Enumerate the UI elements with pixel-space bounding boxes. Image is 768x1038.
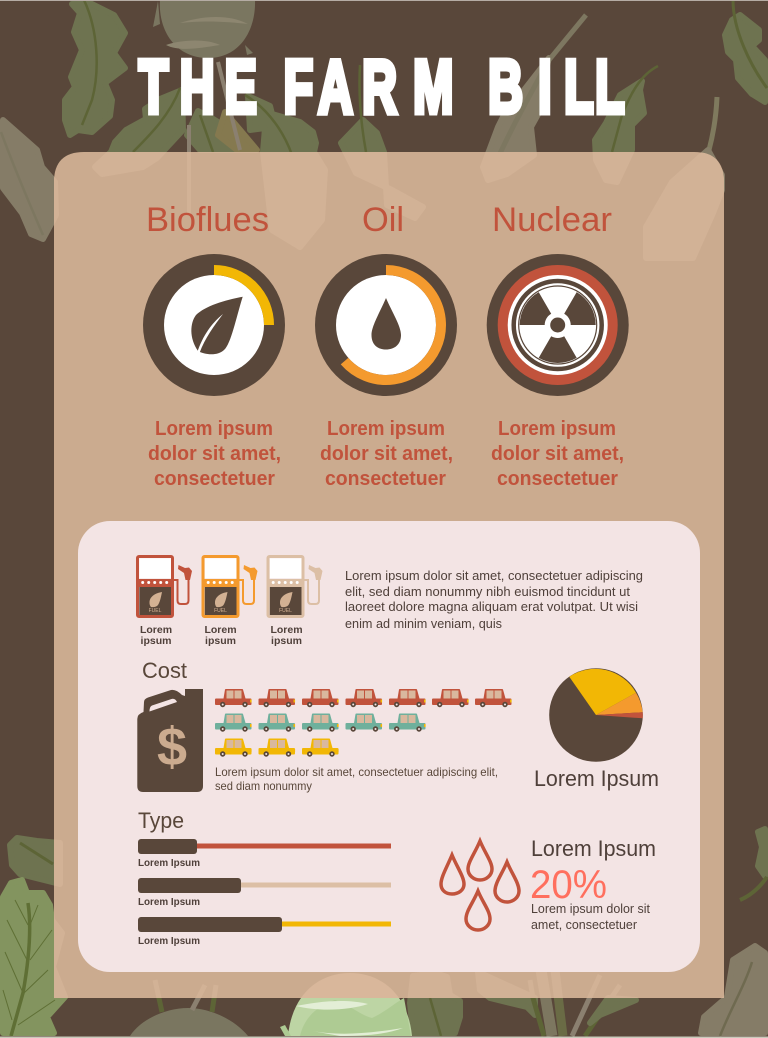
stat number: 20%	[530, 863, 607, 907]
top edge	[0, 0, 768, 1]
icon: tan fuel pump: FUEL	[279, 608, 292, 614]
panel: inner light card	[78, 521, 700, 972]
text block: nuclear caption: Lorem ipsum	[498, 418, 616, 440]
label: pump three	[270, 624, 303, 647]
heading: Cost: Cost	[142, 658, 187, 683]
text block: oil caption: consectetuer	[325, 468, 446, 490]
label: pump two: Lorem	[204, 624, 237, 636]
text block: biofuel caption	[148, 418, 281, 490]
label: pump two	[204, 624, 237, 647]
bar two: Lorem Ipsum	[138, 896, 200, 908]
bottom edge	[0, 1036, 768, 1038]
icon: orange fuel pump	[202, 556, 258, 616]
pie chart	[549, 668, 643, 762]
label: pump two: ipsum	[205, 635, 236, 647]
text block: biofuel caption: consectetuer	[154, 468, 275, 490]
text block: cost caption	[215, 765, 498, 793]
text block: stat caption	[531, 902, 651, 932]
title: THE FARM BILL	[139, 46, 625, 129]
label: pump three: ipsum	[271, 635, 302, 647]
stat heading: Lorem Ipsum	[531, 836, 656, 861]
icon: water drops	[441, 841, 519, 930]
icon row: yellow cars	[215, 738, 339, 757]
label: pump one	[140, 624, 172, 647]
label: pump one: Lorem	[140, 624, 172, 636]
text block: intro paragraph: Lorem ipsum dolor sit amet, consectetuer adipiscing	[345, 569, 643, 583]
bar one: Lorem Ipsum	[138, 857, 200, 869]
icon row: teal cars	[215, 714, 426, 732]
text block: cost caption: Lorem ipsum dolor sit amet, consectetuer adipiscing elit,	[215, 765, 498, 779]
label: pump one: ipsum	[141, 635, 171, 647]
heading: Bioflues: Bioflues	[146, 201, 269, 239]
bar three	[138, 917, 391, 947]
text block: oil caption	[320, 418, 453, 490]
icon: red fuel pump	[136, 556, 192, 616]
bar three: Lorem Ipsum	[138, 935, 200, 947]
text block: nuclear caption: dolor sit amet,	[491, 443, 624, 465]
text block: intro paragraph: laoreet dolore magna aliquam erat volutpat. Ut wisi	[345, 600, 638, 614]
text block: nuclear caption	[491, 418, 624, 490]
text block: biofuel caption: Lorem ipsum	[155, 418, 273, 440]
icon: oil gauge	[315, 254, 457, 396]
cabbage at the top	[153, 1, 253, 55]
text block: stat caption: Lorem ipsum dolor sit	[531, 902, 651, 916]
icon: fuel can with dollar sign: $	[157, 717, 187, 777]
text block: intro paragraph	[345, 569, 643, 631]
icon: orange fuel pump: FUEL	[214, 608, 227, 614]
pie chart label: Lorem Ipsum	[534, 766, 659, 791]
heading: Oil: Oil	[362, 201, 404, 239]
text block: cost caption: sed diam nonummy	[215, 779, 312, 793]
icon row: red cars	[215, 689, 512, 707]
icon: tan fuel pump	[266, 556, 322, 616]
cabbage at the bottom	[280, 998, 411, 1036]
text block: oil caption: Lorem ipsum	[327, 418, 445, 440]
heading: Type: Type	[138, 808, 184, 833]
text block: nuclear caption: consectetuer	[497, 468, 618, 490]
icon: nuclear gauge	[487, 254, 629, 396]
text block: intro paragraph: elit, sed diam nonummy nibh euismod tincidunt ut	[345, 585, 631, 599]
panel: main tan card	[54, 152, 724, 998]
text block: intro paragraph: enim ad minim veniam, quis	[345, 617, 502, 631]
icon: fuel can with dollar sign	[137, 689, 203, 792]
icon: biofuel gauge	[143, 254, 285, 396]
text block: biofuel caption: dolor sit amet,	[148, 443, 281, 465]
text block: stat caption: amet, consectetuer	[531, 918, 637, 932]
bar two	[138, 878, 391, 908]
text block: oil caption: dolor sit amet,	[320, 443, 453, 465]
label: pump three: Lorem	[270, 624, 303, 636]
leaves showing through the card	[54, 152, 724, 998]
icon: red fuel pump: FUEL	[149, 608, 162, 614]
heading: Nuclear: Nuclear	[492, 201, 612, 239]
bar one	[138, 839, 391, 869]
